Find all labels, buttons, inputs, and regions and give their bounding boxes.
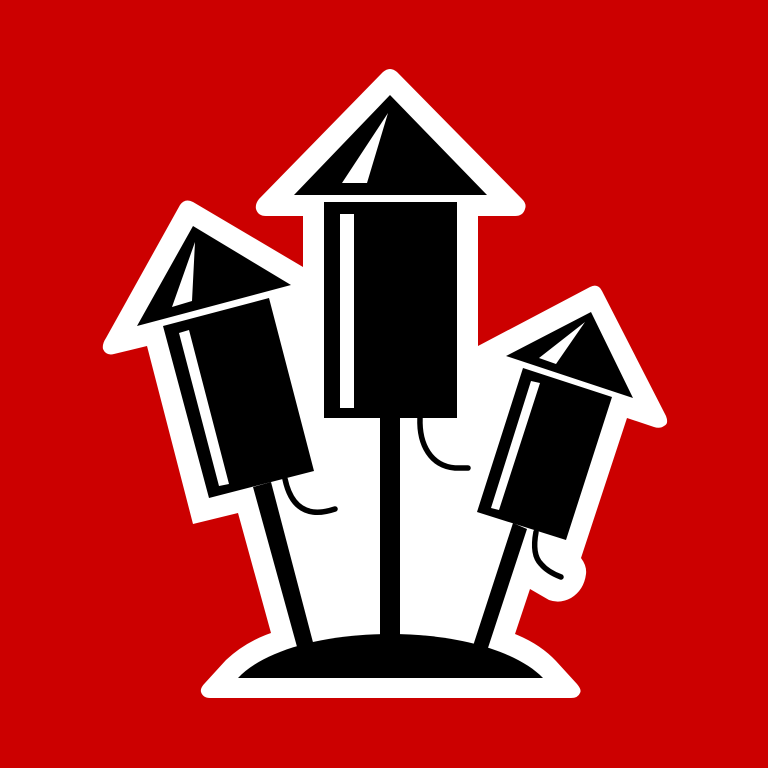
right rocket body xyxy=(477,368,612,540)
centre rocket fuse xyxy=(420,418,468,468)
centre rocket cone xyxy=(294,95,487,195)
right rocket fuse xyxy=(535,532,561,577)
left rocket body xyxy=(163,298,314,498)
left rocket fuse xyxy=(285,479,335,512)
left rocket xyxy=(137,226,335,654)
centre rocket body xyxy=(324,202,457,418)
left rocket cone xyxy=(137,226,291,326)
white sticker outline xyxy=(103,69,667,698)
centre rocket stick xyxy=(380,418,400,640)
left rocket stick xyxy=(253,482,315,654)
mound base xyxy=(238,634,543,678)
centre rocket xyxy=(294,95,487,640)
right rocket stick xyxy=(472,523,527,654)
right rocket xyxy=(472,312,633,654)
right rocket cone xyxy=(506,312,633,398)
